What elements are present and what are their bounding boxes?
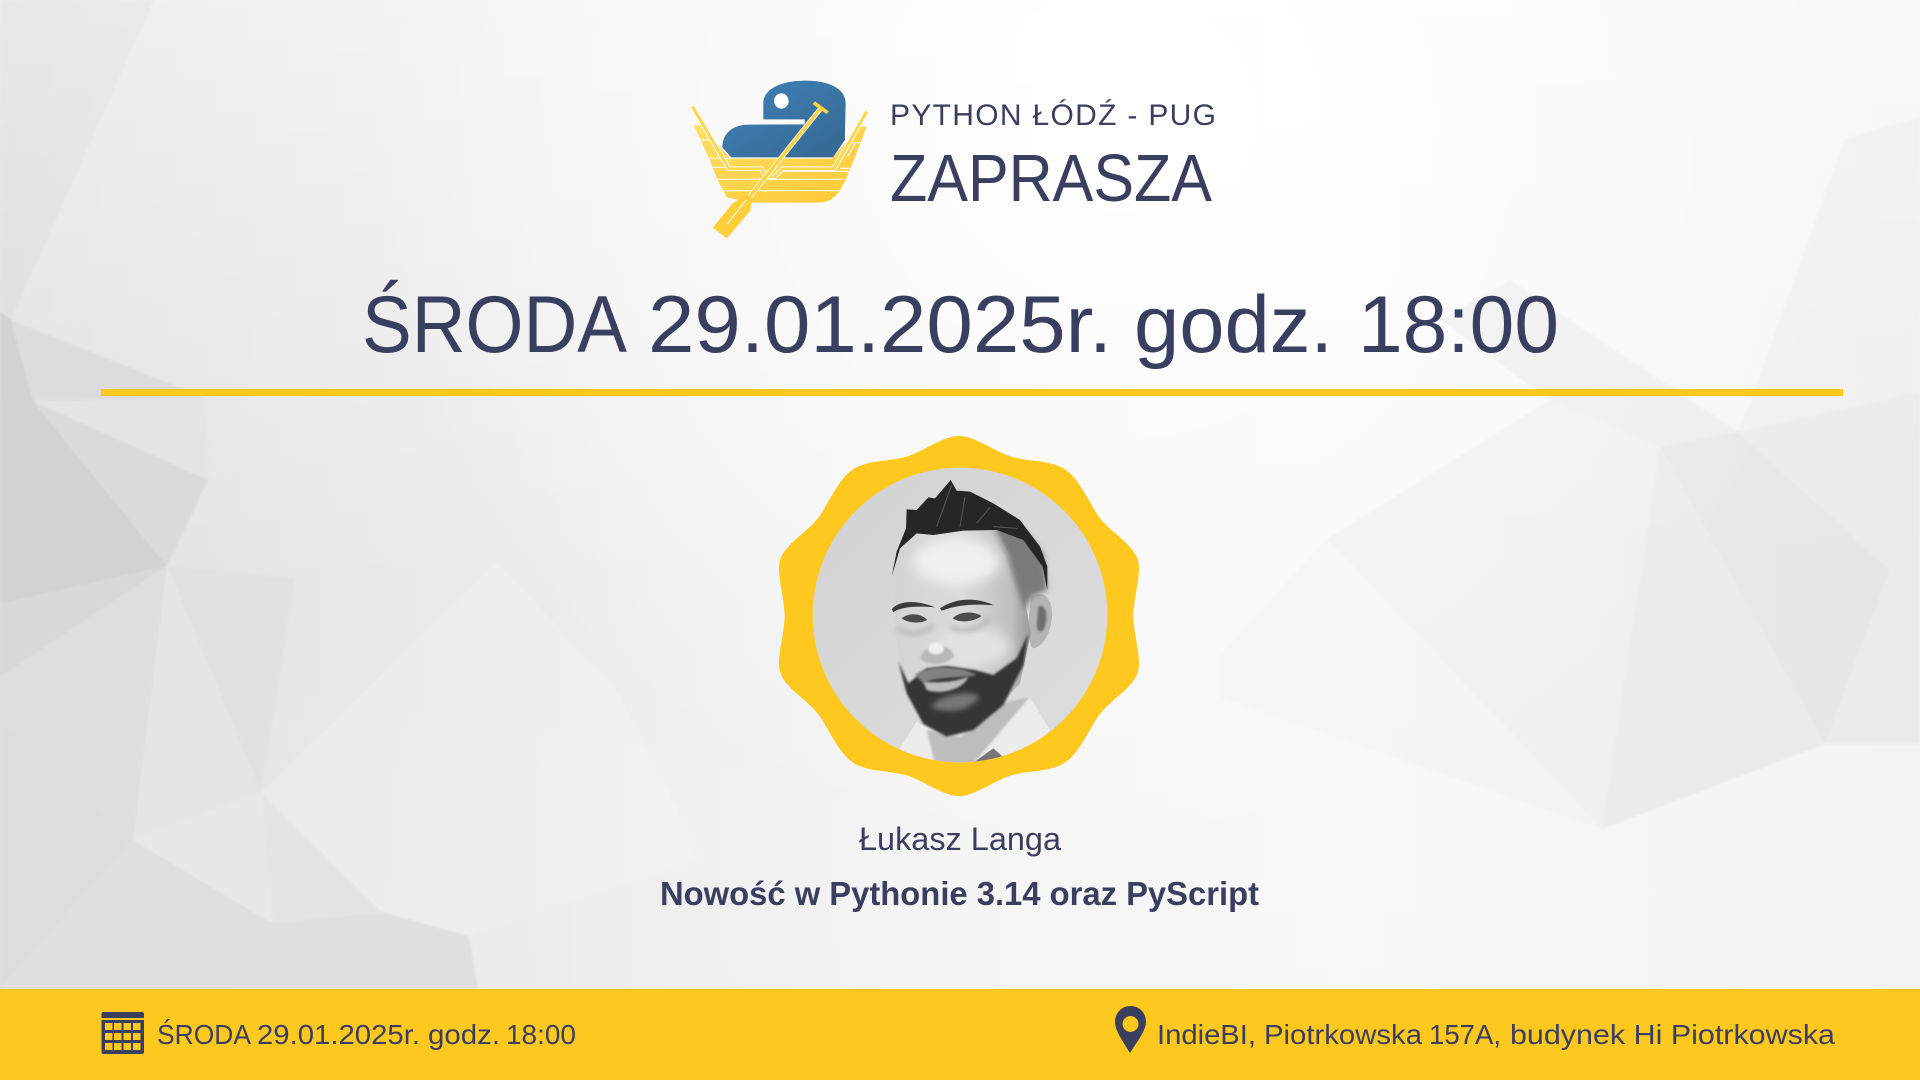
moustache (915, 667, 977, 683)
yellow divider (101, 389, 1843, 396)
talk title: Nowość w Pythonie 3.14 oraz PyScript (660, 875, 1259, 912)
boat hull (694, 125, 867, 203)
footer date and time: 18:00 (506, 1019, 576, 1050)
heading: invitation: ZAPRASZA (890, 141, 1212, 216)
footer venue: IndieBI, (1157, 1019, 1256, 1050)
snake head (722, 81, 846, 157)
left eyebrow (892, 602, 935, 612)
right eyebrow (940, 600, 994, 611)
snake eye (774, 93, 789, 109)
face (946, 530, 1030, 736)
heading: date and time (362, 279, 1559, 370)
forehead highlight (913, 538, 1000, 585)
nose (920, 645, 954, 664)
beard (898, 633, 1028, 737)
heading: date and time: 18:00 (1358, 280, 1559, 370)
footer date and time: ŚRODA (157, 1018, 251, 1050)
oar (713, 103, 828, 238)
footer date and time: godz. (428, 1019, 500, 1050)
mouth and chin patch (923, 677, 968, 692)
speaker name: Łukasz Langa (859, 821, 1061, 857)
shirt (897, 695, 1050, 767)
logo: python snake in rowing boat (693, 81, 867, 238)
hair with spikes (892, 480, 1047, 590)
scalloped yellow badge (779, 436, 1139, 796)
footer date and time: 29.01.2025r. (257, 1019, 420, 1050)
speaker badge with portrait (779, 436, 1139, 796)
heading: date and time: godz. (1134, 280, 1333, 370)
cheek shading (937, 627, 1010, 667)
heading: date and time: 29.01.2025r. (648, 280, 1112, 370)
boat gunwales (693, 107, 867, 177)
left eye (902, 614, 927, 623)
eye sockets (897, 618, 990, 633)
footer venue: 157A, (1429, 1019, 1501, 1050)
heading: date and time: ŚRODA (362, 279, 627, 370)
ear (1029, 594, 1052, 648)
footer bar (0, 989, 1920, 1080)
icon: map pin (1115, 1006, 1146, 1053)
footer venue: budynek Hi Piotrkowska (1510, 1019, 1835, 1050)
footer venue (1157, 1019, 1835, 1050)
speaker portrait (810, 467, 1110, 767)
icon: calendar (102, 1012, 144, 1054)
hull plank gaps (698, 140, 861, 191)
right eye (953, 612, 982, 621)
shaved side of head (993, 527, 1047, 610)
footer date and time (157, 1018, 576, 1050)
footer venue: Piotrkowska (1264, 1019, 1422, 1050)
logo caption: organiser: PYTHON ŁÓDŹ - PUG (890, 99, 1216, 132)
